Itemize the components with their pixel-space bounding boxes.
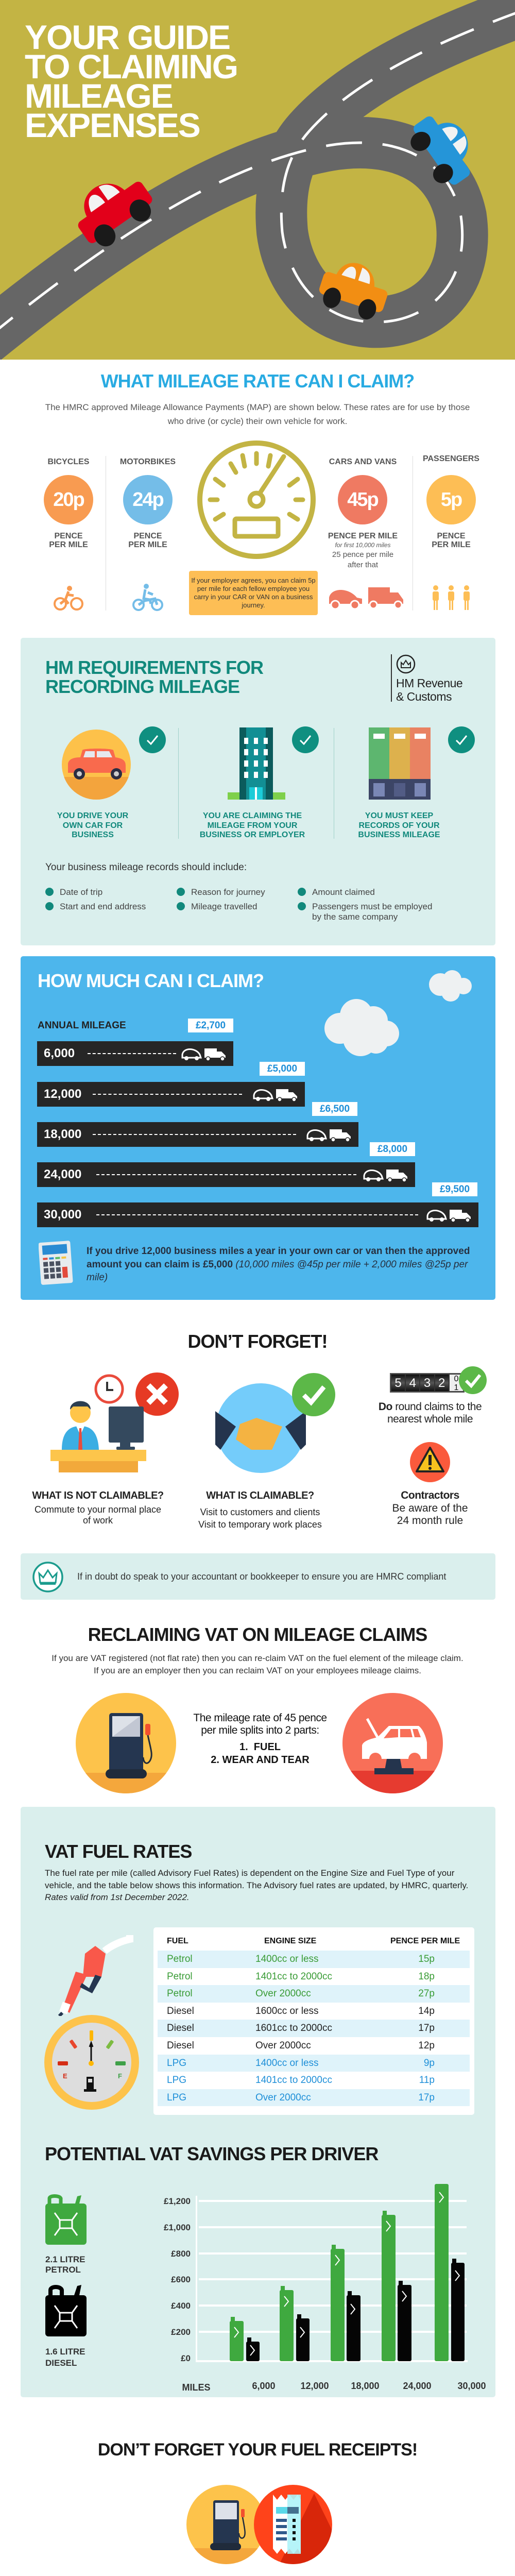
table: fuel rates: 11p [419,2075,435,2086]
requirement: drive own car: BUSINESS [72,831,114,839]
bar chart: mileage bars: 6,000 [44,1046,75,1060]
heading: HOW MUCH CAN I CLAIM? [38,970,264,991]
text: VAT intro: If you are an employer then you can reclaim VAT on your employees mileage claims. [94,1666,421,1675]
requirement: claiming from employer [200,726,319,839]
heading: potential VAT savings: POTENTIAL VAT SAVINGS PER DRIVER [45,2143,378,2164]
callouts: amounts: £2,700 [196,1020,226,1031]
text: mileage split: 2. WEAR AND TEAR [211,1754,310,1766]
table: fuel rates: 14p [418,2006,435,2016]
legend: diesel [45,2285,87,2368]
rate: passengers: PENCE [437,532,466,540]
logo: HMRC: HM Revenue [396,676,462,690]
table: fuel rates: Diesel [167,2006,194,2016]
callout: HMRC compliant: If in doubt do speak to your accountant or bookkeeper to ensure you are HMRC compliant [77,1571,446,1582]
table: fuel rates: 17p [418,2092,435,2103]
icon: warning [410,1442,450,1482]
bar chart: mileage bars: 12,000 [44,1087,81,1101]
icon: fuel pump [76,1693,176,1793]
heading: don't forget: DON’T FORGET! [187,1331,327,1352]
table: fuel rates: 1600cc or less [255,2006,319,2016]
panel: HM requirements [21,638,495,945]
legend: diesel: DIESEL [45,2358,77,2368]
requirement: drive own car: YOU DRIVE YOUR [57,811,128,820]
checklist: Date of trip [60,887,102,897]
heading: RECORDING MILEAGE [45,676,239,697]
bar chart: mileage bars: £8,000 [377,1144,407,1155]
text: not claimable [32,1490,164,1526]
bar chart: VAT savings: £1,200 [164,2196,191,2206]
requirement: keep records: YOU MUST KEEP [365,811,433,820]
table: fuel rates: 1401cc to 2000cc [255,1971,332,1982]
text: mileage split [193,1712,327,1766]
table: fuel rates [153,1927,474,2115]
requirement: claiming from employer: MILEAGE FROM YOUR [208,821,297,829]
intro text: The HMRC approved Mileage Allowance Payments (MAP) are shown below. These rates are for use by those who drive (or cycle) their own vehicle for work. [45,402,470,426]
requirement: keep records: RECORDS OF YOUR [358,821,440,829]
icon: car on lift [342,1693,443,1793]
requirement: drive own car [57,726,166,839]
callouts: amounts [188,1019,233,1032]
table: fuel rates: LPG [167,2058,186,2069]
table: fuel rates: LPG [167,2075,186,2086]
text: claimable [198,1490,322,1530]
checklist [45,887,432,922]
bar chart: mileage bars [37,1019,478,1227]
text: claimable: Visit to temporary work places [198,1519,322,1530]
text: not claimable: WHAT IS NOT CLAIMABLE? [32,1490,164,1501]
table: fuel rates: 1400cc or less [255,1954,319,1964]
icon: blue car [403,105,486,193]
text: mileage split: per mile splits into 2 parts: [201,1724,319,1736]
rate: cars and vans: for first 10,000 miles [335,541,391,549]
icon: speedometer [197,440,316,559]
table: fuel rates: Petrol [167,1954,193,1964]
bar chart: mileage bars: 18,000 [44,1127,81,1141]
rate: cars and vans: PENCE PER MILE [328,532,398,540]
requirement: keep records [358,726,475,839]
icon: fuel gauge [44,2015,139,2110]
table: fuel rates: 15p [418,1954,435,1964]
icon: handshake [215,1373,335,1473]
text: contractors: Be aware of the [392,1502,468,1514]
requirement: claiming from employer: BUSINESS OR EMPLOYER [200,831,305,839]
icon: fuel gauge: E [63,2072,67,2080]
bar chart: VAT savings: 12,000 [300,2381,329,2391]
icon: bicycle [54,586,83,611]
icon: pump and receipt [186,2485,332,2564]
table: fuel rates: 1601cc to 2000cc [255,2023,332,2033]
text: claimable: WHAT IS CLAIMABLE? [206,1490,314,1501]
text: not claimable: Commute to your normal place [35,1504,161,1515]
rate: passengers: PER MILE [432,540,471,549]
rate: cars and vans: CARS AND VANS [329,457,397,466]
icon: odometer: 0 [454,1375,458,1383]
text: fuel rates intro: The fuel rate per mile (called Advisory Fuel Rates) is dependent on the Engine Size and Fuel Type of your vehicle, and the table below shows this information. The Advisory fuel rates are updated, by HMRC, quarterly. Rates valid from 1st December 2022. [45,1868,468,1902]
icon: orange car [315,255,394,324]
logo: HMRC: & Customs [396,690,452,703]
bar chart: mileage bars: £9,500 [440,1184,470,1195]
icon: fuel nozzle [58,1935,133,2016]
table: fuel rates: 1400cc or less [255,2058,319,2069]
title: YOUR GUIDE [25,18,230,56]
text: VAT intro: If you are VAT registered (not flat rate) then you can re-claim VAT on the fuel element of the mileage claim. [52,1653,464,1663]
text: not claimable: of work [83,1515,113,1526]
icon: fuel gauge: F [118,2072,122,2080]
icon: clouds [324,970,472,1056]
table: fuel rates: ENGINE SIZE [264,1937,316,1945]
table: fuel rates: Diesel [167,2023,194,2033]
table: fuel rates: 1401cc to 2000cc [255,2075,332,2086]
text: records include: Your business mileage records should include: [45,862,247,873]
callout: passengers: If your employer agrees, you can claim 5p per mile for each fellow employee you carry in your CAR or VAN on a business journey. [191,577,316,609]
legend: petrol: PETROL [45,2265,81,2275]
legend: diesel: 1.6 LITRE [45,2347,85,2357]
table: fuel rates: PENCE PER MILE [390,1937,460,1945]
bar chart: VAT savings: 30,000 [457,2381,486,2391]
rate: motorbikes: PER MILE [128,540,167,549]
icon: odometer [390,1366,487,1394]
text: VAT intro [52,1653,464,1675]
rate: motorbikes [120,457,176,611]
legend: petrol: 2.1 LITRE [45,2255,85,2264]
bar chart: mileage bars: £5,000 [267,1063,297,1074]
panel: VAT fuel rates + savings [21,1807,495,2397]
checklist: Reason for journey [191,887,265,897]
rate: passengers [423,454,479,610]
rate: bicycles [44,457,93,611]
header [0,0,515,360]
rate: bicycles: 20p [53,489,84,511]
icon: odometer: 2 [438,1376,445,1390]
rate: bicycles: PENCE [54,532,83,540]
bar chart: VAT savings: £1,000 [164,2223,191,2232]
requirement: claiming from employer: YOU ARE CLAIMING THE [203,811,302,820]
bar chart: VAT savings: £800 [171,2249,191,2259]
logo: HMRC [391,654,473,702]
bar chart: VAT savings: £400 [171,2301,191,2311]
icon: red car [65,164,161,255]
title: MILEAGE [25,77,173,115]
icon: odometer: 4 [409,1376,416,1390]
rate: bicycles: PER MILE [49,540,88,549]
bar chart: VAT savings: £600 [171,2275,191,2284]
text: example claim: If you drive 12,000 business miles a year in your own car or van then the approved amount you can claim is £5,000 (10,000 miles @45p per mile + 2,000 miles @25p per mile) [87,1246,470,1283]
text: contractors: 24 month rule [397,1515,463,1527]
text: mileage split: 1. FUEL [239,1741,281,1753]
legend: petrol [45,2194,87,2275]
table: fuel rates: 18p [418,1971,435,1982]
table: fuel rates: 27p [418,1988,435,1999]
rate: passengers: 5p [441,489,461,511]
text: contractors [392,1489,468,1527]
heading: fuel receipts: DON’T FORGET YOUR FUEL RECEIPTS! [98,2440,417,2460]
icon: odometer: 5 [394,1376,402,1390]
bar chart: VAT savings: 24,000 [403,2381,432,2391]
checklist: Mileage travelled [191,902,258,911]
heading: what mileage rate: WHAT MILEAGE RATE CAN I CLAIM? [101,370,414,392]
bar chart: VAT savings: MILES [182,2382,211,2393]
divider [178,728,179,839]
bar chart: VAT savings: £0 [181,2353,191,2363]
table: fuel rates: Over 2000cc [255,2092,311,2103]
icon: three people [433,585,470,610]
icon: odometer: 1 [454,1383,458,1392]
bar chart: mileage bars: 30,000 [44,1208,81,1222]
table: fuel rates: 17p [418,2023,435,2033]
icons: car and van [181,1048,226,1060]
text: round claims: Do round claims to the nearest whole mile [379,1401,482,1425]
bar chart: VAT savings: 18,000 [351,2381,380,2391]
icon: car and van [329,587,403,608]
table: fuel rates: LPG [167,2092,186,2103]
bar chart: VAT savings: £200 [171,2327,191,2337]
table: fuel rates: Petrol [167,1971,193,1982]
text: claimable: Visit to customers and clients [200,1507,320,1517]
text: mileage split: The mileage rate of 45 pence [193,1712,327,1724]
heading [45,657,264,697]
rate: motorbikes: MOTORBIKES [120,457,176,466]
title: EXPENSES [25,106,200,144]
rate: cars and vans: 45p [347,489,378,511]
rate: cars and vans [328,457,403,608]
label: ANNUAL MILEAGE [38,1020,126,1031]
table: fuel rates: Over 2000cc [255,1988,311,1999]
icon: motorbike [132,584,163,611]
callout: HMRC compliant [21,1553,495,1600]
rate: motorbikes: PENCE [133,532,162,540]
rate: cars and vans: after that [348,561,378,569]
checklist: by the same company [312,912,398,922]
table: fuel rates: Diesel [167,2040,194,2051]
checklist: Amount claimed [312,887,375,897]
table: fuel rates: FUEL [167,1937,188,1945]
icon: odometer: 3 [424,1376,431,1390]
icon: desk worker [50,1372,179,1472]
rate: bicycles: BICYCLES [48,457,89,466]
bar chart: VAT savings: 6,000 [252,2381,276,2391]
bar chart: VAT savings [164,2184,486,2393]
title [25,18,237,144]
checklist: Start and end address [60,902,146,911]
heading: VAT FUEL RATES [45,1841,192,1862]
heading: HM REQUIREMENTS FOR [45,657,263,678]
title: TO CLAIMING [25,47,237,86]
bar chart: mileage bars: £6,500 [320,1104,350,1114]
rate: cars and vans: 25 pence per mile [332,550,393,559]
requirement: keep records: BUSINESS MILEAGE [358,831,440,839]
bar chart: mileage bars: 24,000 [44,1167,81,1181]
panel: how much can I claim [21,956,495,1300]
checklist: Passengers must be employed [312,902,432,911]
requirement: drive own car: OWN CAR FOR [63,821,123,829]
road [0,8,515,340]
table: fuel rates: 12p [418,2040,435,2051]
rate: passengers: PASSENGERS [423,454,479,463]
icon: calculator [39,1241,73,1285]
table: fuel rates: 9p [424,2058,435,2069]
heading: reclaiming VAT: RECLAIMING VAT ON MILEAGE CLAIMS [88,1624,427,1645]
table: fuel rates: Petrol [167,1988,193,1999]
rate: motorbikes: 24p [132,489,163,511]
text: contractors: Contractors [401,1489,459,1501]
table: fuel rates: Over 2000cc [255,2040,311,2051]
